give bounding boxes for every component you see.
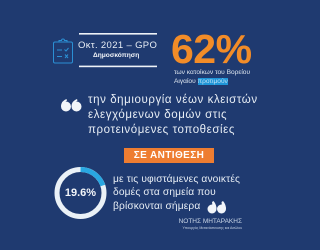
icon: clipboard <box>54 39 72 63</box>
contrast banner <box>124 148 214 163</box>
contrast text: βρίσκονται σήμερα <box>113 201 200 212</box>
contrast text: με τις υφιστάμενες ανοικτές <box>113 174 240 185</box>
contrast banner: ΣΕ ΑΝΤΙΘΕΣΗ <box>134 150 204 161</box>
quote text: ελεγχόμενων δομών στις <box>88 109 227 121</box>
contrast text: δομές στα σημεία που <box>113 187 216 198</box>
quote text: προτεινόμενες τοποθεσίες <box>88 124 235 136</box>
attribution <box>179 218 242 230</box>
survey date: Οκτ. 2021 – GPO <box>78 40 157 51</box>
donut chart <box>57 169 104 216</box>
contrast text <box>113 174 240 212</box>
survey label: Δημοσκόπηση <box>93 52 139 59</box>
survey header <box>78 40 157 59</box>
speaker name: ΝΟΤΗΣ ΜΗΤΑΡΑΚΗΣ <box>179 218 242 225</box>
donut value: 19.6% <box>65 187 96 199</box>
icon: opening quote <box>61 99 82 112</box>
quote text: την δημιουργία νέων κλειστών <box>88 94 258 106</box>
quote text <box>88 94 258 136</box>
percentage caption: των κατοίκων του Βορείου <box>174 69 250 76</box>
percentage caption <box>174 69 250 85</box>
speaker role: Υπουργός Μετανάστευσης και Ασύλου <box>182 226 242 230</box>
icon: closing quote <box>208 201 226 214</box>
percentage caption: Αιγαίου προτιμούν <box>174 78 228 85</box>
big percentage: 62% <box>171 26 252 72</box>
